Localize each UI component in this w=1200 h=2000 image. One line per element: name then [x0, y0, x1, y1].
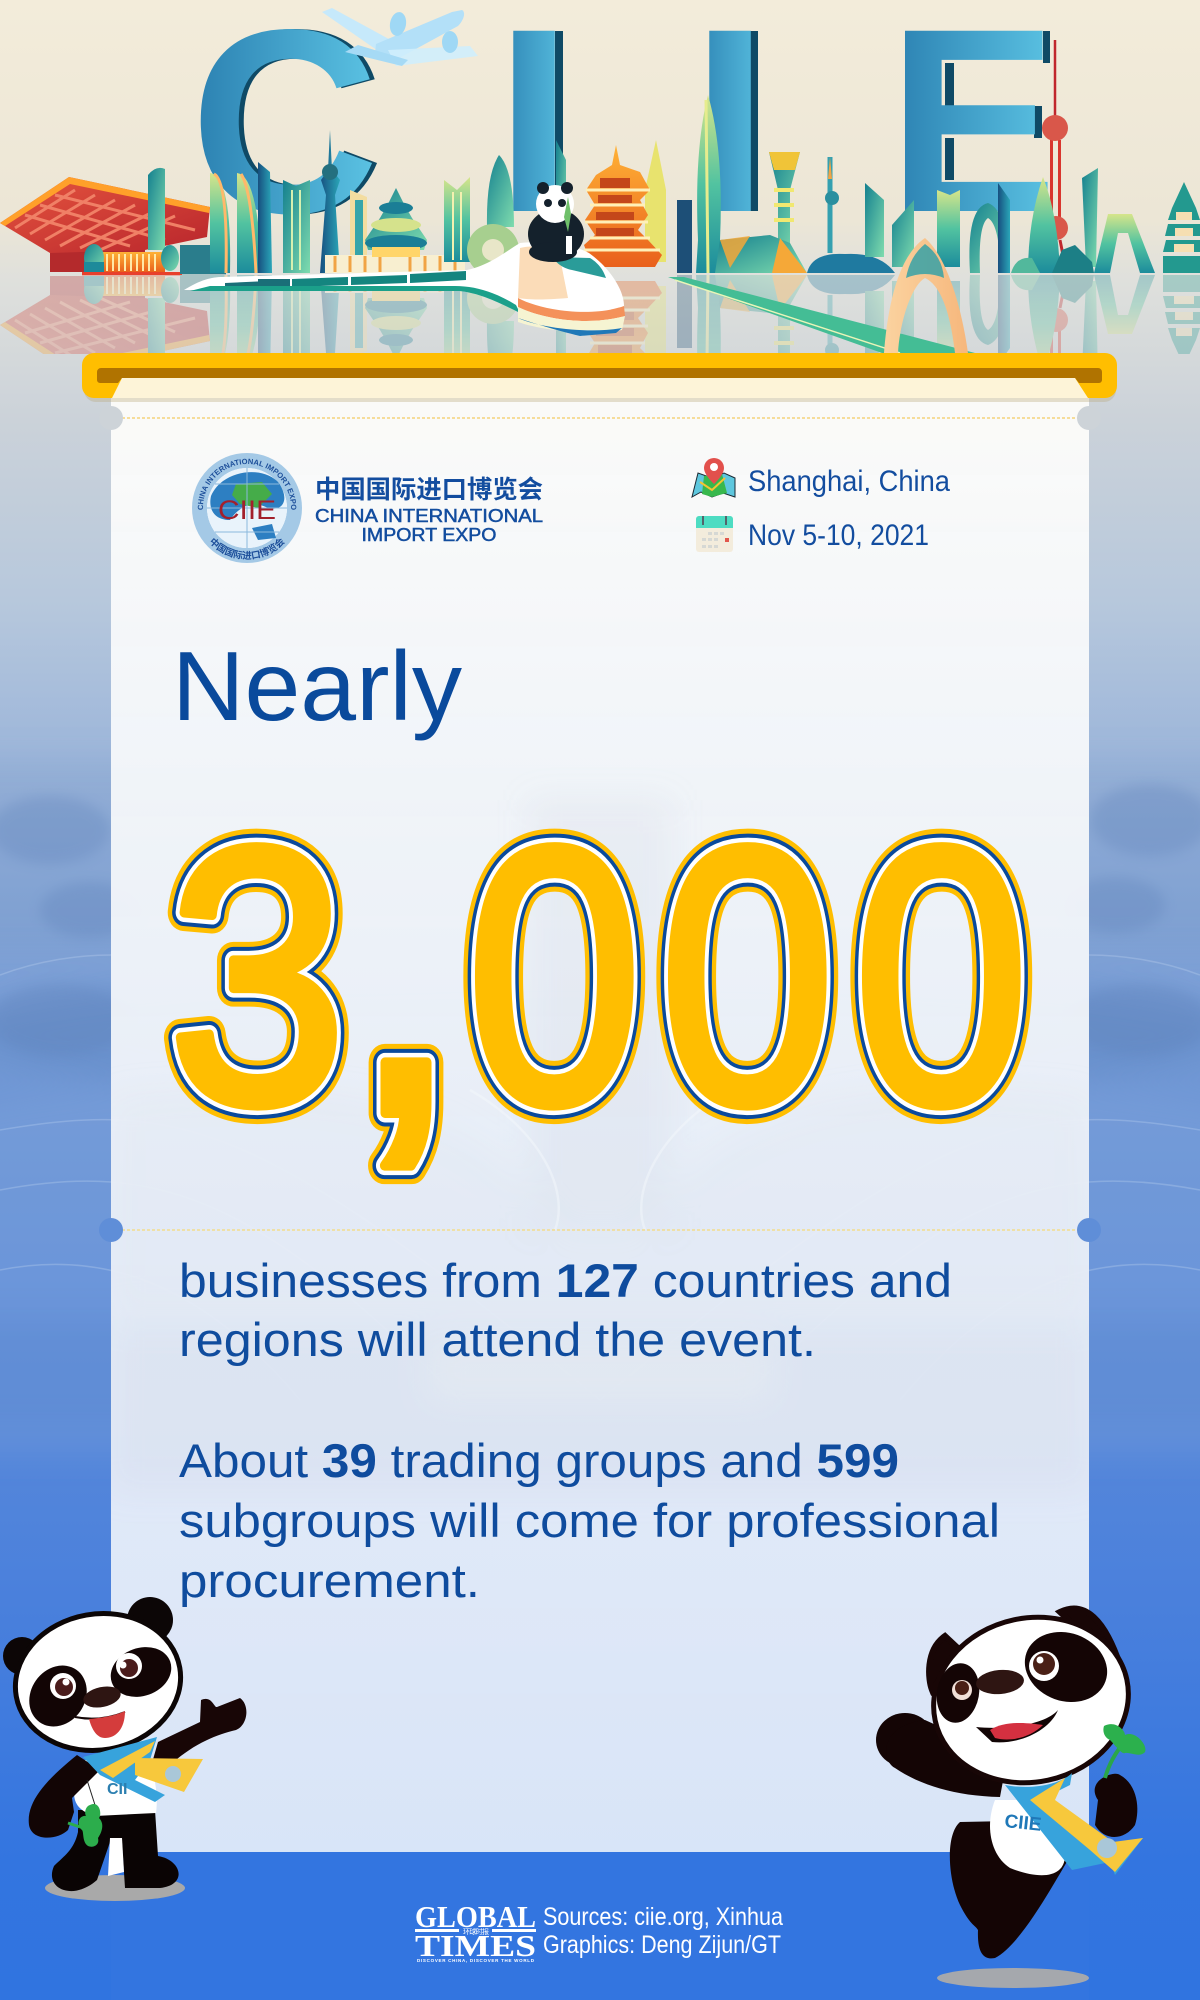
- scroll rod: [82, 353, 1117, 402]
- logo: CIIE globe emblem: CHINA INTERNATIONAL IMPORT EXPO: [198, 458, 296, 510]
- central green spire and dark block: [677, 95, 722, 273]
- Yellow Crane Tower: [584, 140, 666, 267]
- panda on train: [528, 182, 584, 262]
- body text paragraph two: procurement.: [179, 1554, 480, 1607]
- funnel tower: [769, 152, 800, 243]
- source credits: Graphics: Deng Zijun/GT: [543, 1931, 781, 1959]
- Oriental Pearl Tower: [1042, 40, 1068, 270]
- body text paragraph one: [179, 1254, 952, 1366]
- logo wordmark: 中国国际进口博览会: [315, 476, 543, 504]
- number outline: white ring: [168, 772, 1029, 1185]
- body text paragraph one: regions will attend the event.: [179, 1313, 816, 1366]
- logo wordmark: [315, 476, 543, 545]
- twin arc towers: [210, 162, 272, 273]
- green towers and spire: [283, 130, 367, 273]
- logo: Global Times: 环球时报: [463, 1927, 489, 1937]
- logo: Global Times: GLOBAL: [415, 1899, 536, 1934]
- logo: CIIE globe emblem: 中国国际进口博览会: [210, 538, 285, 560]
- number outline: blue ring: [168, 772, 1029, 1185]
- logo: Global Times: DISCOVER CHINA, DISCOVER THE WORLD: [417, 1958, 535, 1963]
- logo: Global Times: TIMES: [415, 1928, 536, 1963]
- CIIE giant letters: [190, 0, 1058, 268]
- dashed fold line upper: [122, 417, 1078, 419]
- date text: Nov 5-10, 2021: [748, 519, 929, 552]
- logo wordmark: CHINA INTERNATIONAL: [315, 506, 543, 526]
- mascot: left panda: CII: [107, 1781, 127, 1798]
- dashed fold line lower: [122, 1229, 1078, 1231]
- number fill: 0: [467, 773, 642, 1180]
- body text paragraph two: subgroups will come for professional: [179, 1494, 1000, 1547]
- pagoda: [1163, 182, 1200, 273]
- number fill: 0: [854, 773, 1029, 1180]
- number fill: 0: [660, 773, 835, 1180]
- source credits: Sources: ciie.org, Xinhua: [543, 1903, 783, 1931]
- pavilion side tower: [148, 168, 165, 250]
- logo: CIIE globe emblem: CIIE: [218, 495, 276, 525]
- icon: map pin: [692, 458, 735, 497]
- road and bridge arch: [668, 238, 975, 353]
- icon: calendar: [696, 516, 733, 552]
- ground reflection of skyline: [0, 274, 1200, 354]
- number fill: 3: [168, 772, 347, 1180]
- number fill: [168, 772, 1029, 1185]
- number outline: gold halo: [168, 772, 1029, 1185]
- body text paragraph two: About 39 trading groups and 599: [179, 1434, 899, 1487]
- footer band: [111, 1852, 1089, 2000]
- low orange hall: [82, 244, 226, 275]
- mascot: right panda: CIIE: [1003, 1811, 1042, 1836]
- mascot: right panda: [876, 1599, 1145, 1988]
- CCTV tower: [1094, 214, 1155, 273]
- logo: CIIE globe emblem: [192, 453, 302, 563]
- Shanghai and leaf towers: [444, 140, 566, 276]
- big number: 3,000: [168, 772, 1029, 1185]
- number fill: ,: [364, 805, 447, 1185]
- geometric hall: [715, 235, 807, 273]
- paper notches: [99, 406, 1101, 1242]
- location text: Shanghai, China: [748, 465, 950, 498]
- body text paragraph one: businesses from 127 countries and: [179, 1254, 952, 1307]
- background: stadium photo texture: [0, 760, 1200, 1450]
- stadium ghost inside panel: [111, 800, 1089, 1490]
- panel: paper scroll: [99, 378, 1101, 1852]
- Temple of Heaven: [325, 188, 465, 273]
- logo wordmark: IMPORT EXPO: [362, 525, 496, 545]
- skyline buildings: [0, 40, 1200, 276]
- logo: Global Times: [415, 1899, 536, 1963]
- body text paragraph two: [179, 1434, 1000, 1607]
- China Pavilion: [0, 177, 210, 272]
- cream scroll top: [112, 378, 1088, 400]
- icon: airplane: [322, 8, 478, 66]
- source credits: [543, 1903, 783, 1959]
- dome hall and spire: [807, 157, 914, 273]
- right hand towers: [937, 168, 1098, 273]
- heading: Nearly: Nearly: [172, 631, 462, 741]
- mascot: left panda: [3, 1597, 246, 1901]
- train: [184, 242, 625, 336]
